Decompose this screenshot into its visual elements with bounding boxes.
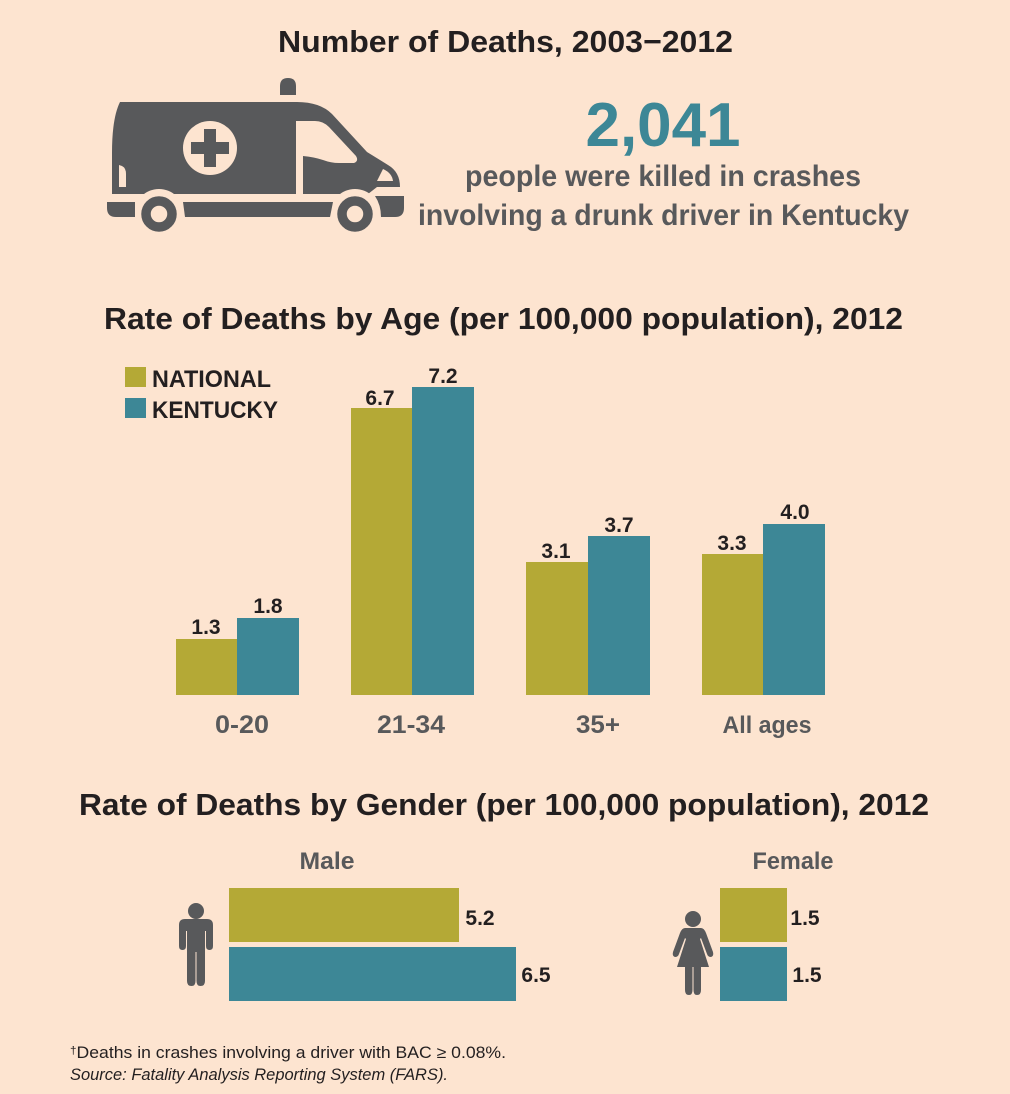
footnote: Source: Fatality Analysis Reporting System (FARS). — [70, 1066, 448, 1084]
panel: male: 6.5 — [521, 964, 551, 987]
legend — [125, 366, 278, 424]
footnote — [70, 1044, 506, 1084]
panel: male: 5.2 — [465, 907, 495, 930]
heading: rate of deaths by age: Rate of Deaths by Age (per 100,000 population), 2012 — [104, 301, 903, 336]
panel: male: Male — [300, 848, 354, 875]
group: 35+: 3.7 — [604, 514, 634, 537]
group: 35+: 3.1 — [541, 540, 571, 563]
footnote: Deaths in crashes involving a driver with BAC ≥ 0.08%. — [77, 1044, 506, 1062]
group: all ages — [702, 501, 825, 739]
group: 0-20: 1.8 — [253, 595, 283, 618]
panel: female: 1.5 — [792, 964, 822, 987]
panel: female — [673, 848, 834, 1001]
group: 35+ — [526, 514, 650, 739]
group: 21-34 — [351, 365, 474, 739]
description text: people were killed in crashes — [465, 160, 861, 193]
title: number of deaths: Number of Deaths, 2003−2012 — [278, 24, 733, 59]
group: all ages: 4.0 — [780, 501, 810, 524]
footnote: † — [70, 1045, 77, 1057]
group: all ages: All ages — [722, 712, 812, 739]
legend: KENTUCKY — [152, 397, 278, 424]
group: 21-34: 7.2 — [428, 365, 458, 388]
group: 21-34: 6.7 — [365, 387, 395, 410]
bar chart: deaths by age — [176, 365, 825, 739]
big number: 2,041: 2,041 — [586, 91, 740, 160]
group: 0-20 — [176, 595, 299, 739]
icon: ambulance — [107, 78, 404, 239]
heading: rate of deaths by gender: Rate of Deaths by Gender (per 100,000 population), 2012 — [79, 787, 929, 822]
description text: involving a drunk driver in Kentucky — [418, 199, 909, 232]
description text — [418, 160, 909, 232]
group: 21-34: 21-34 — [377, 711, 445, 739]
group: all ages: 3.3 — [717, 532, 747, 555]
icon: woman — [673, 911, 713, 995]
legend: NATIONAL — [152, 366, 271, 393]
group: 0-20: 1.3 — [191, 616, 221, 639]
icon: man — [179, 903, 213, 986]
group: 0-20: 0-20 — [215, 711, 269, 739]
panel: female: 1.5 — [790, 907, 820, 930]
panel: female: Female — [752, 848, 834, 875]
panel: male — [179, 848, 551, 1001]
group: 35+: 35+ — [576, 711, 620, 739]
